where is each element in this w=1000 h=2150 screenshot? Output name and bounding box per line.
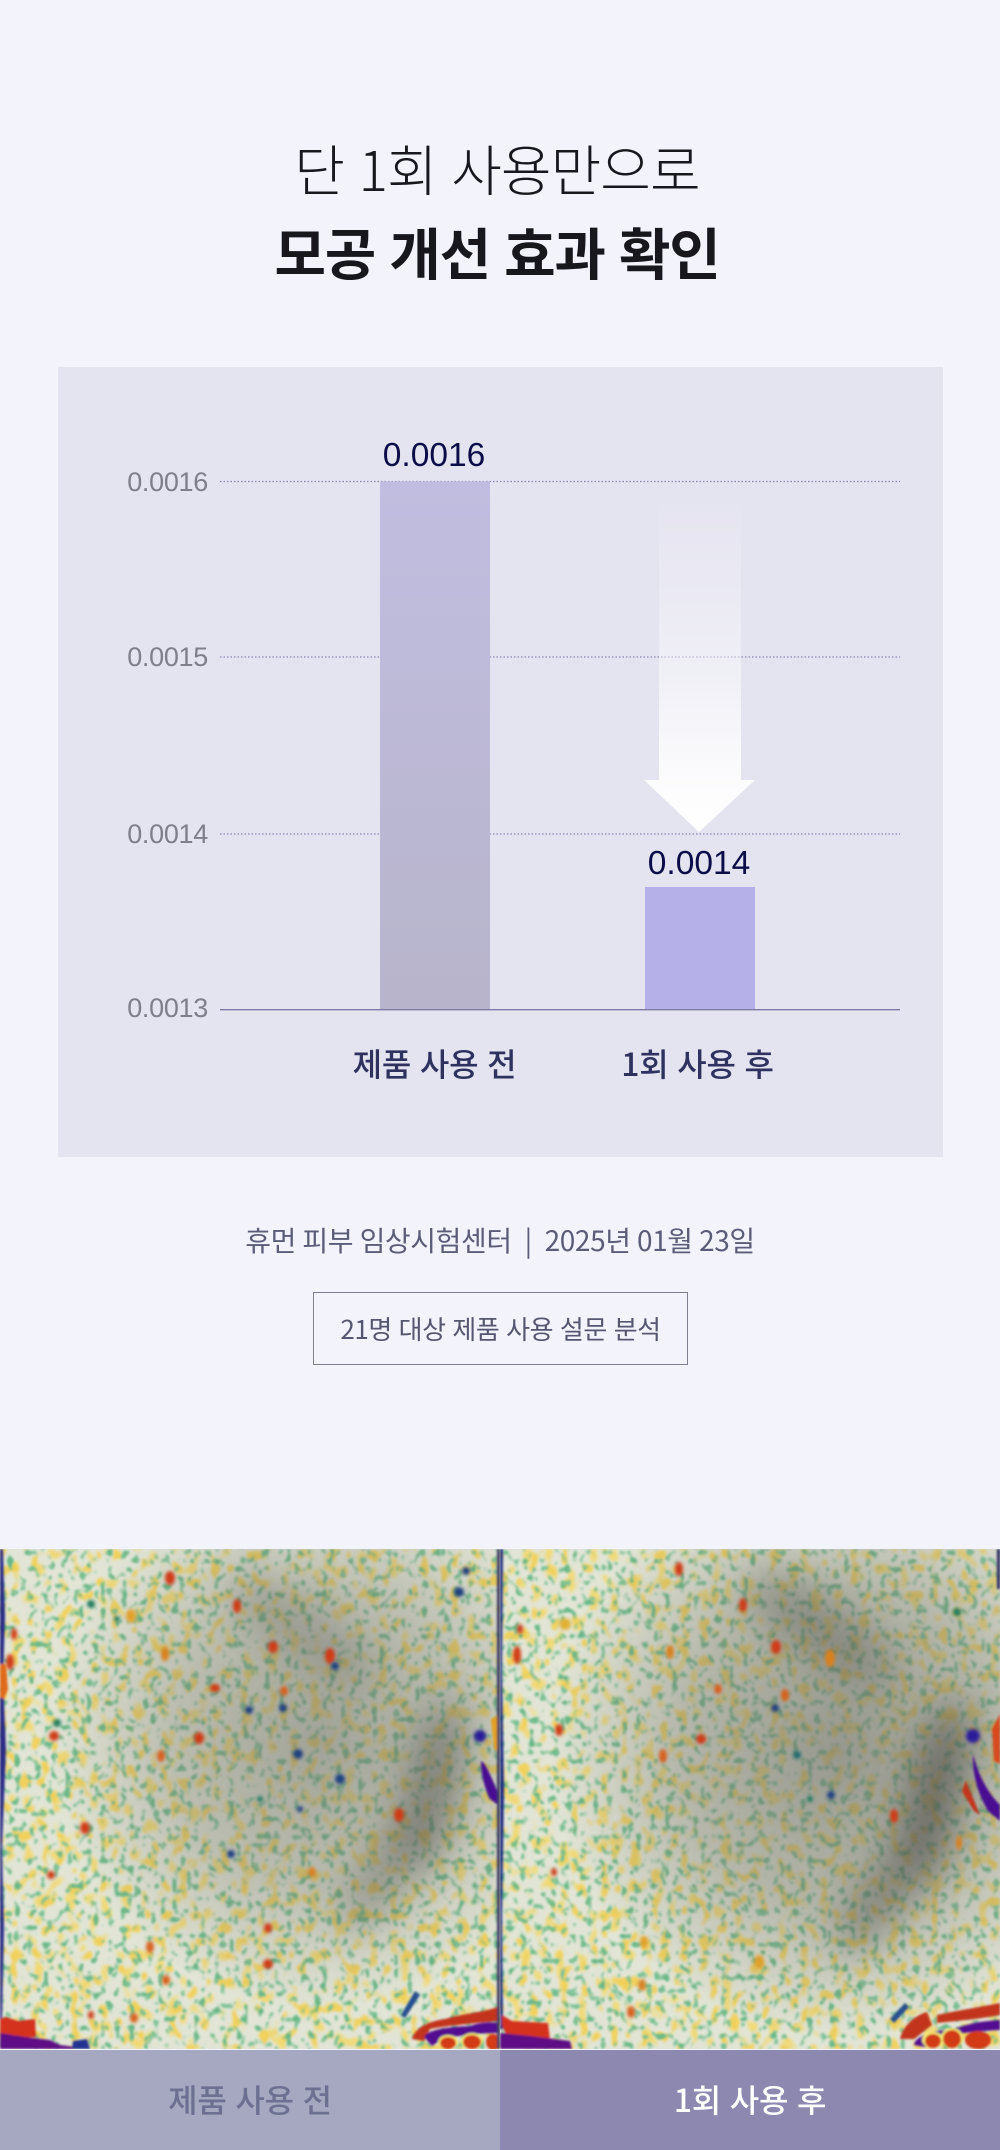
caption: after one use: 1회 사용 후 xyxy=(674,2076,826,2122)
red pore spots xyxy=(513,1562,962,2018)
category labels xyxy=(353,1040,774,1086)
shadow: cheek crescent xyxy=(500,1549,1000,2049)
heatmap: after one use xyxy=(500,1549,1000,2049)
title line 1: 단 1회 사용만으로 xyxy=(294,127,700,207)
y axis labels: 0.0013 xyxy=(127,993,208,1023)
category labels: 제품 사용 전 xyxy=(353,1040,516,1086)
arrow: decrease xyxy=(644,503,755,832)
y axis labels: 0.0016 xyxy=(127,467,208,497)
y axis labels: 0.0015 xyxy=(127,642,208,672)
noise: yellow and green speckle xyxy=(0,1549,500,2049)
survey note box: 21명 대상 제품 사용 설문 분석 xyxy=(340,1310,661,1347)
shadow: cheek crescent xyxy=(0,1549,500,2049)
edge artifacts xyxy=(500,1549,1000,2049)
category labels: 1회 사용 후 xyxy=(621,1040,774,1086)
noise: yellow and green speckle xyxy=(500,1549,1000,2049)
title xyxy=(275,127,719,292)
y axis labels xyxy=(127,467,208,1023)
baseline axis xyxy=(220,1009,900,1011)
survey note box xyxy=(313,1292,688,1365)
source note: 휴먼 피부 임상시험센터 | 2025년 01월 23일 xyxy=(245,1220,755,1260)
blue pore spots xyxy=(53,1567,486,1858)
caption: after one use xyxy=(500,2050,1000,2150)
heatmap: before use xyxy=(0,1549,500,2049)
caption: before use: 제품 사용 전 xyxy=(168,2076,332,2122)
y axis labels: 0.0014 xyxy=(127,819,208,849)
bar: after one use xyxy=(645,887,755,1010)
bar: before use xyxy=(380,482,490,1010)
value label: before: 0.0016 xyxy=(383,437,485,474)
value label: after: 0.0014 xyxy=(648,845,750,882)
title line 2: 모공 개선 효과 확인 xyxy=(275,211,719,292)
red pore spots xyxy=(6,1571,404,2023)
blue pore spots xyxy=(771,1608,980,1802)
caption: before use xyxy=(0,2050,500,2150)
edge artifacts xyxy=(0,1549,500,2050)
panel: bar chart xyxy=(58,367,943,1157)
